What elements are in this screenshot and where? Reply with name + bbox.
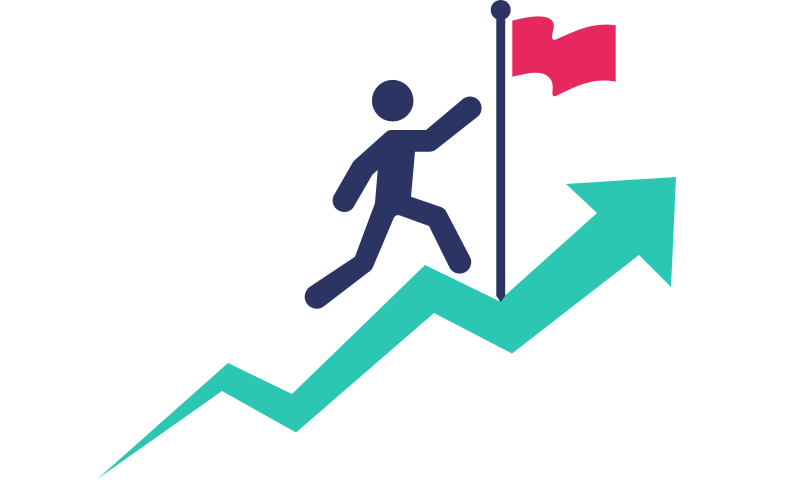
icon: red flag — [512, 16, 616, 96]
person body and limbs — [305, 97, 482, 309]
person head — [372, 80, 414, 121]
icon: flag pole — [491, 0, 511, 302]
icon: climbing person — [305, 80, 482, 309]
arrow: rising green zigzag — [98, 177, 676, 478]
